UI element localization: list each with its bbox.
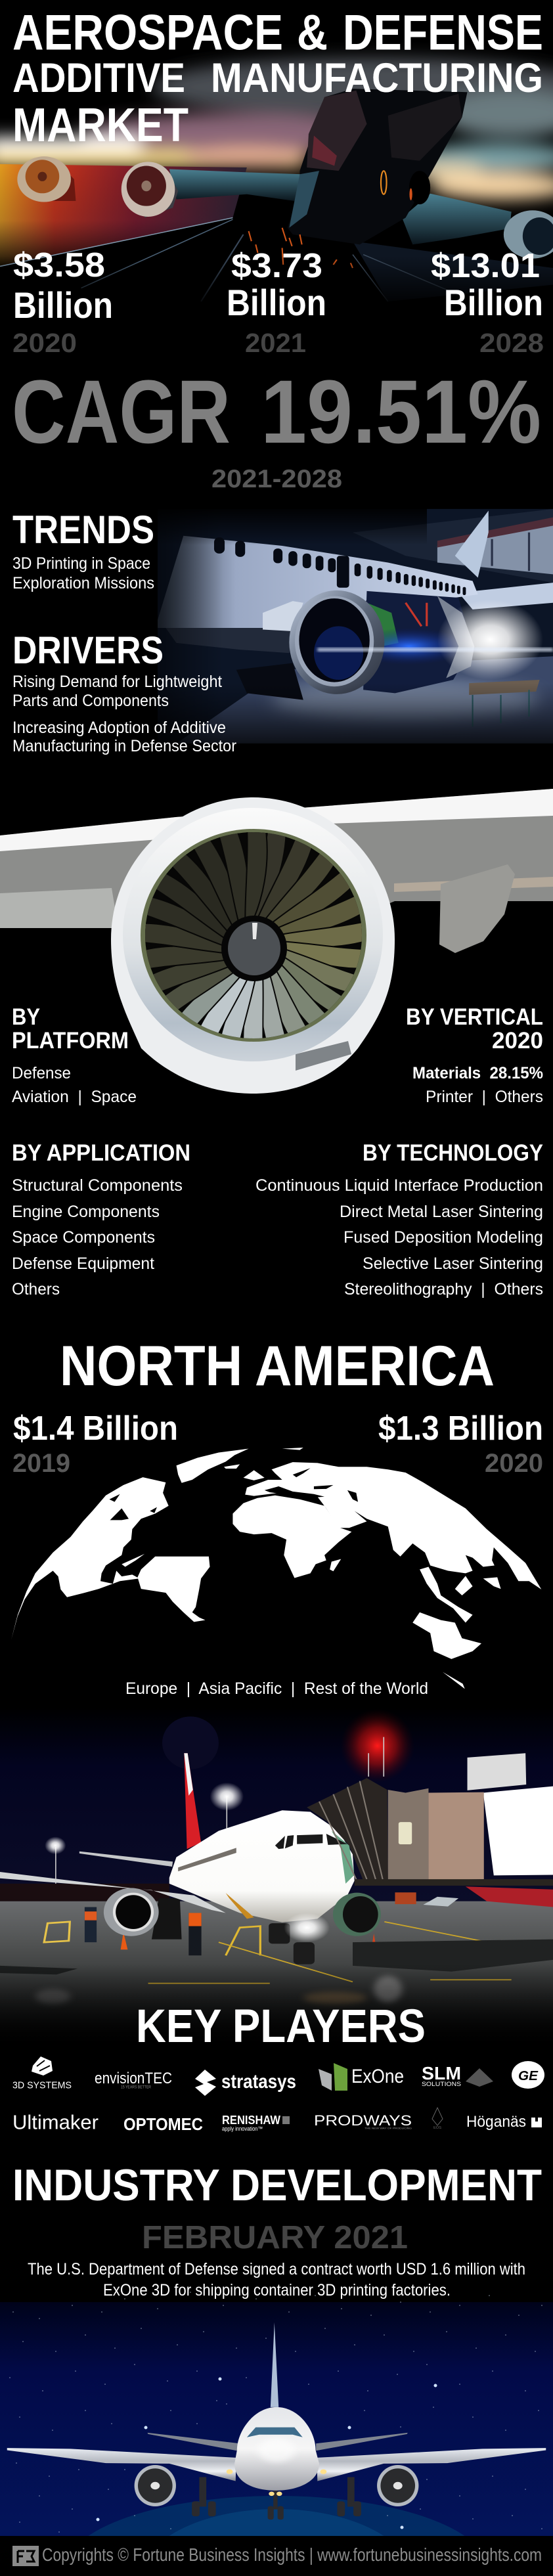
footer logo	[12, 2546, 39, 2566]
logo: Ultimaker: Ultimaker	[12, 2111, 99, 2133]
by platform: BY	[12, 1004, 40, 1030]
landing gear	[192, 2477, 361, 2520]
logo: Renishaw: apply innovation™	[222, 2125, 263, 2132]
nose gear and light	[269, 1913, 330, 1965]
by vertical 2020: Printer | Others	[426, 1088, 543, 1106]
market value 2020	[12, 246, 113, 358]
logo: SLM Solutions: SLM	[422, 2063, 461, 2083]
region heading: NORTH AMERICA	[60, 1335, 495, 1398]
engine cowl	[111, 797, 395, 1094]
drivers block: Increasing Adoption of Additive	[12, 719, 226, 737]
jet bridge	[307, 1753, 553, 1907]
logo: EnvisionTEC: 15 YEARS BETTER	[121, 2086, 152, 2090]
title: MARKET	[12, 99, 188, 152]
cockpit windshield	[247, 2428, 303, 2437]
north america 2020 value	[378, 1410, 543, 1478]
market value 2021: Billion	[227, 282, 326, 323]
hangar photo: engine under maintenance	[99, 506, 553, 762]
right engine	[333, 1893, 381, 1936]
british isles and iceland	[224, 1448, 303, 1480]
airport night photo: airliner at jet bridge	[0, 1708, 553, 2045]
drivers block: Parts and Components	[12, 692, 169, 710]
market value 2028	[431, 247, 544, 358]
flap track fairing	[439, 864, 515, 953]
cockpit windows	[275, 1834, 347, 1849]
market value 2020: Billion	[13, 284, 113, 326]
by platform: PLATFORM	[12, 1028, 129, 1054]
ground crew and equipment	[0, 1898, 553, 2004]
tail fin	[184, 1753, 201, 1849]
other regions: Europe | Asia Pacific | Rest of the World	[125, 1679, 428, 1698]
title	[12, 5, 543, 152]
market value 2028: 2028	[479, 328, 544, 358]
CAGR headline	[12, 362, 541, 462]
by application: Defense Equipment	[12, 1255, 154, 1273]
tail fin	[271, 2322, 278, 2407]
CAGR headline: CAGR	[12, 362, 231, 462]
key players heading: KEY PLAYERS	[136, 2001, 426, 2053]
logo: Stratasys	[195, 2070, 296, 2096]
trends block	[12, 508, 154, 592]
starry sky with airliner illustration	[0, 2292, 553, 2576]
right engine	[377, 2465, 418, 2506]
title: &	[297, 5, 328, 60]
by vertical 2020: 2020	[492, 1028, 543, 1054]
by application: Structural Components	[12, 1176, 183, 1195]
by technology: Selective Laser Sintering	[363, 1255, 543, 1273]
logo: EOS: EOS	[433, 2126, 442, 2130]
market value 2021	[227, 247, 326, 358]
logo: SLM Solutions: SOLUTIONS	[422, 2081, 461, 2087]
world globe map	[11, 1448, 541, 1689]
by application	[12, 1140, 190, 1299]
by vertical 2020	[406, 1004, 543, 1106]
by technology	[255, 1140, 543, 1299]
logo: 3D Systems: 3D SYSTEMS	[12, 2079, 72, 2091]
by technology: Stereolithography | Others	[344, 1280, 543, 1299]
greenland	[176, 1449, 249, 1483]
drivers block: Manufacturing in Defense Sector	[12, 737, 236, 755]
near left engine	[122, 162, 178, 218]
south east asia	[420, 1567, 501, 1623]
north america landmass	[11, 1477, 169, 1639]
drivers block: Rising Demand for Lightweight	[12, 673, 222, 691]
logo: Stratasys: stratasys	[221, 2071, 296, 2093]
title: ADDITIVE	[12, 55, 185, 101]
fuselage	[234, 2407, 319, 2491]
south america	[137, 1557, 210, 1622]
logo: Hoganas: Höganäs	[466, 2113, 526, 2131]
logo: Prodways: THE NEW WAY OF PRODUCING	[365, 2127, 412, 2129]
development description	[28, 2260, 525, 2299]
market value 2021: 2021	[245, 328, 306, 358]
title: AEROSPACE	[12, 5, 283, 60]
trends block: TRENDS	[12, 508, 154, 552]
by technology: Continuous Liquid Interface Production	[255, 1176, 543, 1195]
by platform: Defense	[12, 1064, 71, 1082]
by platform	[12, 1004, 137, 1106]
by platform: Aviation | Space	[12, 1088, 137, 1106]
by application: Others	[12, 1280, 60, 1299]
logo: EOS	[432, 2108, 443, 2130]
logo: ExOne: ExOne	[351, 2066, 404, 2087]
development date: FEBRUARY 2021	[142, 2220, 408, 2255]
drivers block	[12, 629, 236, 755]
australia	[412, 1612, 481, 1659]
right engine	[504, 210, 553, 259]
landing lights	[227, 2470, 326, 2496]
market value 2028: $13.01	[431, 247, 540, 285]
hero photo: airliner taking off at sunset	[0, 0, 553, 309]
market value 2028: Billion	[444, 282, 543, 323]
wing and turbofan engine photo	[0, 789, 553, 1094]
left wing	[7, 2448, 236, 2481]
by application: BY APPLICATION	[12, 1140, 190, 1166]
north america 2020 value: 2020	[485, 1449, 543, 1478]
logo: 3D Systems	[12, 2056, 72, 2091]
logo: EnvisionTEC: envisionTEC	[95, 2070, 172, 2087]
left engine	[135, 2465, 176, 2506]
logo: Prodways: PRODWAYS	[314, 2112, 412, 2129]
logo: ExOne	[319, 2063, 404, 2091]
by vertical 2020: Materials 28.15%	[412, 1064, 543, 1082]
CAGR period: 2021-2028	[211, 465, 342, 493]
logo: GE: GE	[518, 2069, 539, 2083]
development description: ExOne 3D for shipping container 3D printing factories.	[103, 2281, 451, 2299]
spinner hub	[221, 916, 287, 981]
north america 2019 value: $1.4 Billion	[13, 1410, 178, 1448]
left engine	[104, 1888, 159, 1936]
fuselage	[169, 1810, 355, 1922]
by application: Space Components	[12, 1228, 155, 1247]
by technology: Direct Metal Laser Sintering	[340, 1203, 543, 1221]
trends block: 3D Printing in Space	[12, 554, 150, 573]
drivers block: DRIVERS	[12, 629, 164, 672]
by application: Engine Components	[12, 1203, 160, 1221]
north america 2019 value	[12, 1410, 178, 1478]
wing	[0, 1872, 226, 1913]
far left engine	[17, 156, 76, 202]
market value 2020: $3.58	[13, 246, 105, 284]
horizontal stabilisers	[147, 2433, 408, 2451]
logo: Renishaw: RENISHAW	[222, 2114, 280, 2127]
africa	[232, 1496, 351, 1578]
by technology: Fused Deposition Modeling	[343, 1228, 543, 1247]
market value 2021: $3.73	[231, 247, 322, 285]
north america 2019 value: 2019	[12, 1449, 70, 1478]
logo: GE	[512, 2061, 544, 2089]
stars	[10, 2292, 542, 2532]
eurasia	[245, 1462, 541, 1589]
logo: Optomec: OPTOMEC	[123, 2114, 203, 2134]
trends block: Exploration Missions	[12, 574, 154, 592]
logo: SLM Solutions	[422, 2063, 493, 2087]
fan blades	[145, 832, 362, 1038]
market value 2020: 2020	[12, 328, 77, 358]
logo: Renishaw	[222, 2114, 290, 2132]
right wing	[317, 2448, 546, 2481]
